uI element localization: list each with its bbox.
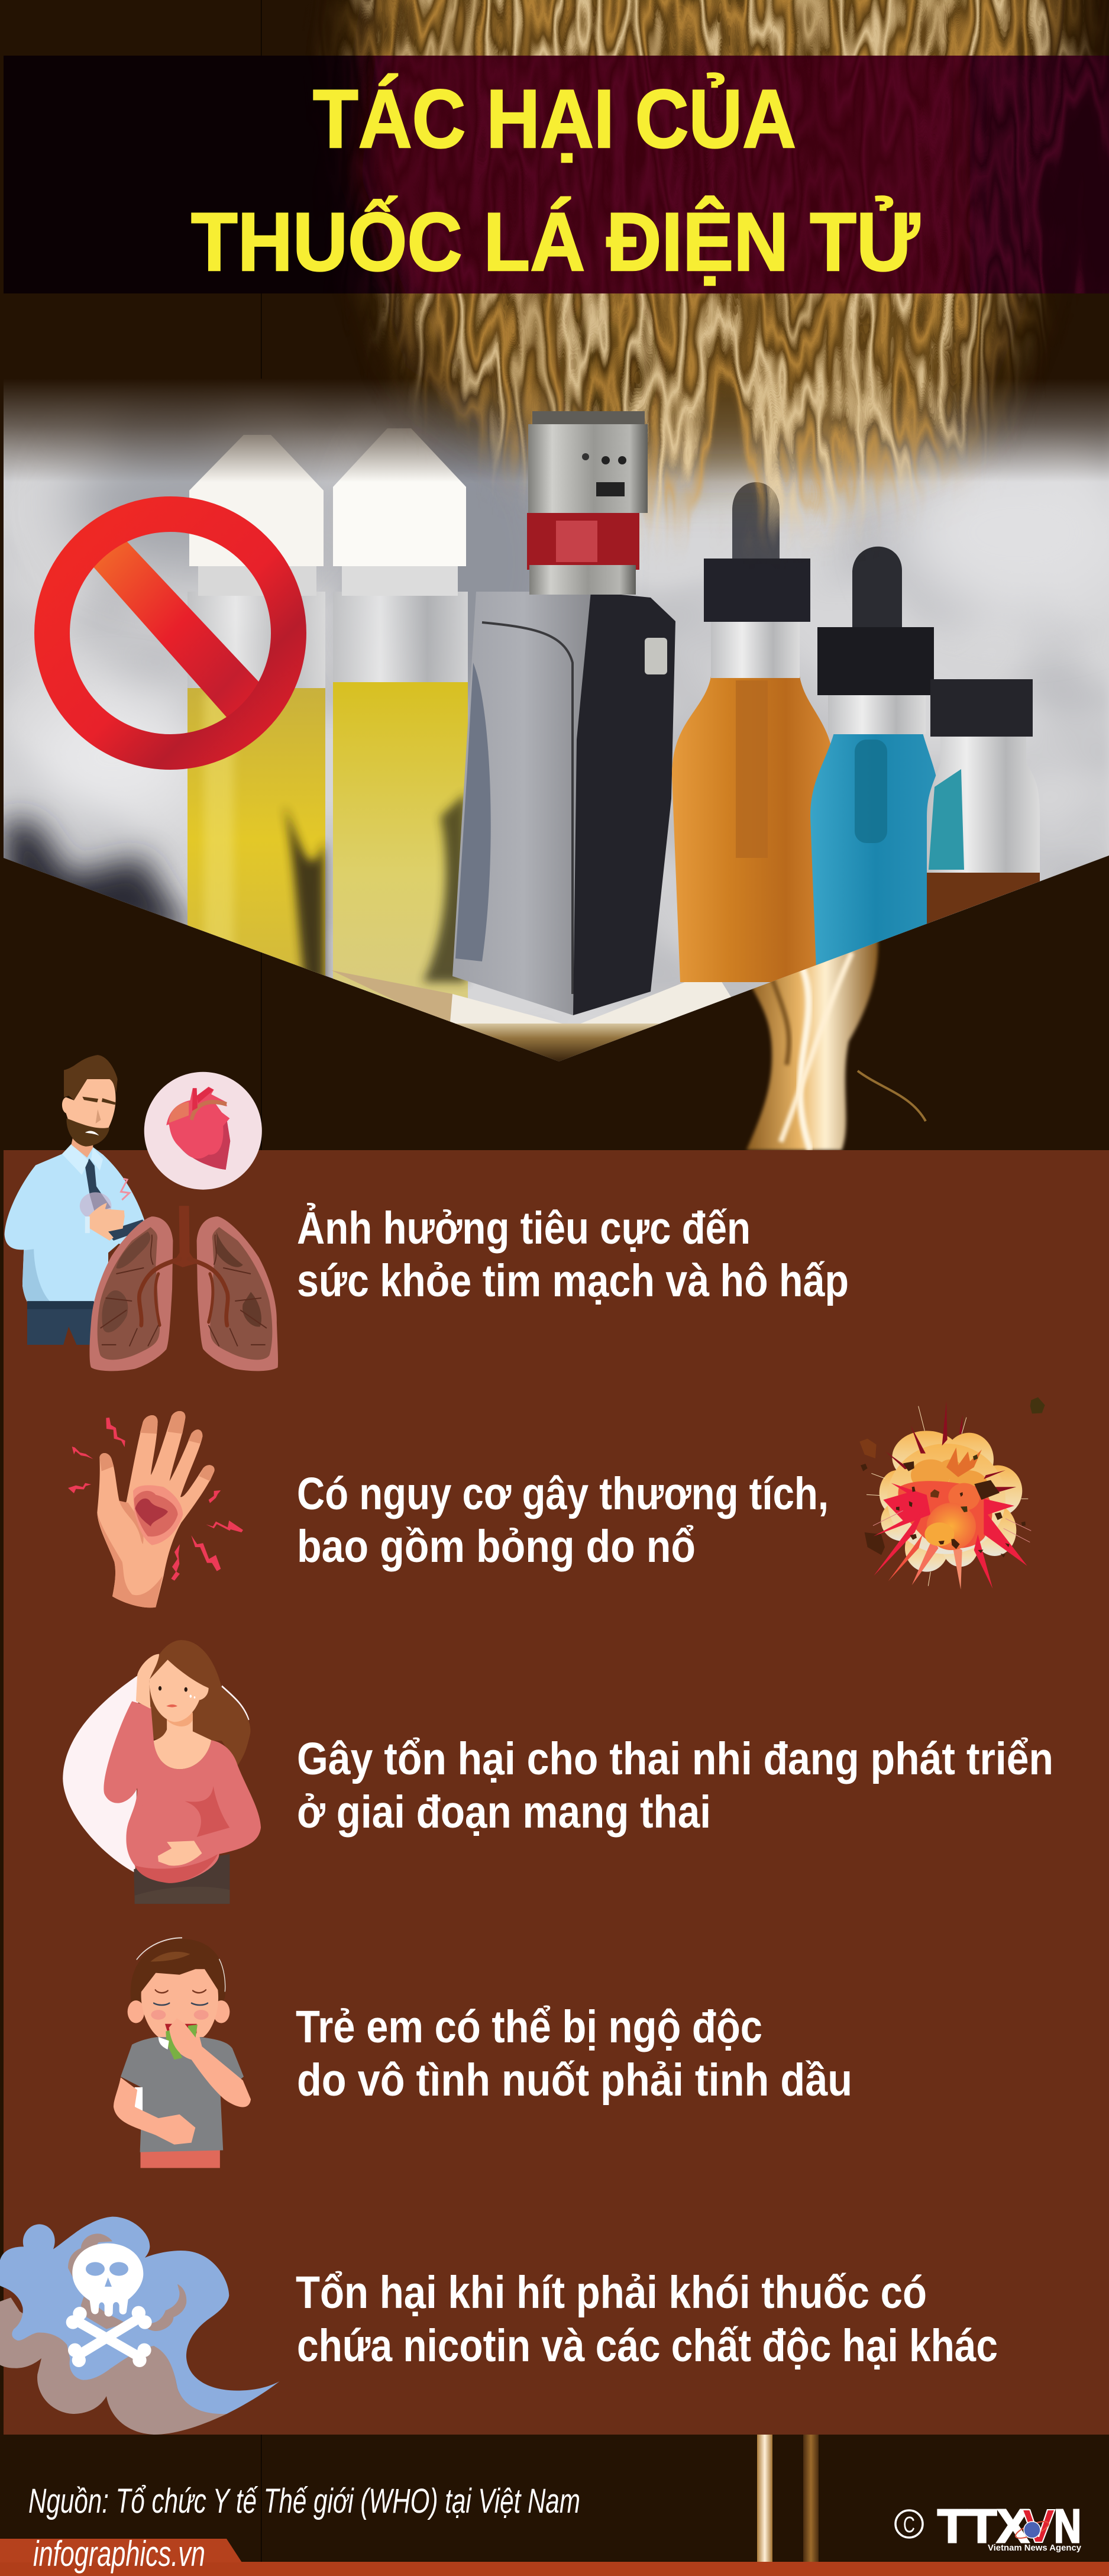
paper and base (331, 970, 473, 1026)
item 5 text: chứa nicotin và các chất độc hại khác (297, 2320, 998, 2371)
item 2 text (297, 1468, 829, 1572)
orange bottle (672, 482, 835, 982)
item 1 illustration: lungs (89, 1206, 278, 1371)
footer strip and website tab (0, 2534, 1109, 2576)
title: TÁC HẠI CỦA (313, 72, 796, 165)
smoke plume below the hero (746, 929, 926, 1150)
bottle 2 (333, 428, 468, 1067)
title (191, 72, 920, 288)
pants (27, 1301, 93, 1345)
TTXVN logo: TTX (937, 2500, 1029, 2552)
item 1 text (297, 1202, 849, 1306)
TTXVN logo: V (1022, 2500, 1055, 2552)
item 4 text (296, 2002, 852, 2106)
item 5 illustration: toxic smoke with skull and crossbones (0, 2217, 280, 2435)
bottle 1 (187, 435, 331, 977)
clear bottle (927, 679, 1040, 924)
item 4 text: Trẻ em có thể bị ngộ độc (296, 2002, 762, 2052)
hero photo: e-liquid bottles and vape device (0, 379, 1109, 1067)
source line: Nguồn: Tổ chức Y tế Thế giới (WHO) tại Việt Nam (28, 2482, 580, 2520)
item 4 text: do vô tình nuốt phải tinh dầu (297, 2055, 852, 2106)
prohibition sign (52, 514, 289, 752)
content panel (4, 1150, 1109, 2435)
item 2 illustration: explosion (859, 1397, 1045, 1590)
shirt (5, 1144, 146, 1303)
item 5 text (296, 2267, 998, 2371)
smoke above the hero (349, 0, 1065, 509)
item 4 illustration: sick child (114, 1938, 251, 2168)
hair back (131, 1939, 226, 2016)
item 3 text (297, 1734, 1053, 1838)
pain marks (121, 1179, 130, 1200)
vape tank (527, 411, 648, 595)
hands (158, 1841, 202, 1865)
item 3 text: ở giai đoạn mang thai (297, 1787, 711, 1838)
smoke lines in footer (757, 2435, 819, 2562)
footer strip and website tab: infographics.vn (33, 2534, 205, 2574)
TTXVN logo: C (903, 2513, 915, 2538)
item 2 illustration: injured hand (68, 1411, 243, 1607)
title band (4, 24, 1109, 331)
sweater (104, 1701, 261, 1883)
item 5 text: Tổn hại khi hít phải khói thuốc có (296, 2267, 927, 2318)
vape device body (452, 592, 675, 1015)
item 3 illustration: pregnant woman (63, 1640, 261, 1904)
face (154, 1715, 211, 1769)
item 1 text: Ảnh hưởng tiêu cực đến (297, 1202, 751, 1254)
item 2 text: Có nguy cơ gây thương tích, (297, 1468, 829, 1519)
title: THUỐC LÁ ĐIỆN TỬ (191, 195, 920, 288)
tie (85, 1158, 111, 1213)
blue bottle (810, 547, 941, 970)
item 1 illustration: heart in circle (144, 1072, 262, 1190)
TTXVN logo: N (1054, 2500, 1081, 2552)
neck and head (72, 1132, 93, 1158)
collar (62, 1144, 103, 1175)
item 1 text: sức khỏe tim mạch và hô hấp (297, 1255, 849, 1306)
TTXVN logo: Vietnam News Agency (988, 2543, 1082, 2553)
ears (128, 2000, 144, 2023)
item 2 text: bao gồm bỏng do nổ (297, 1521, 696, 1572)
sleeve and hand (106, 1219, 148, 1241)
face (141, 1969, 218, 2037)
TTXVN logo (895, 2500, 1082, 2553)
item 1 illustration: man with chest pain (5, 1055, 148, 1345)
